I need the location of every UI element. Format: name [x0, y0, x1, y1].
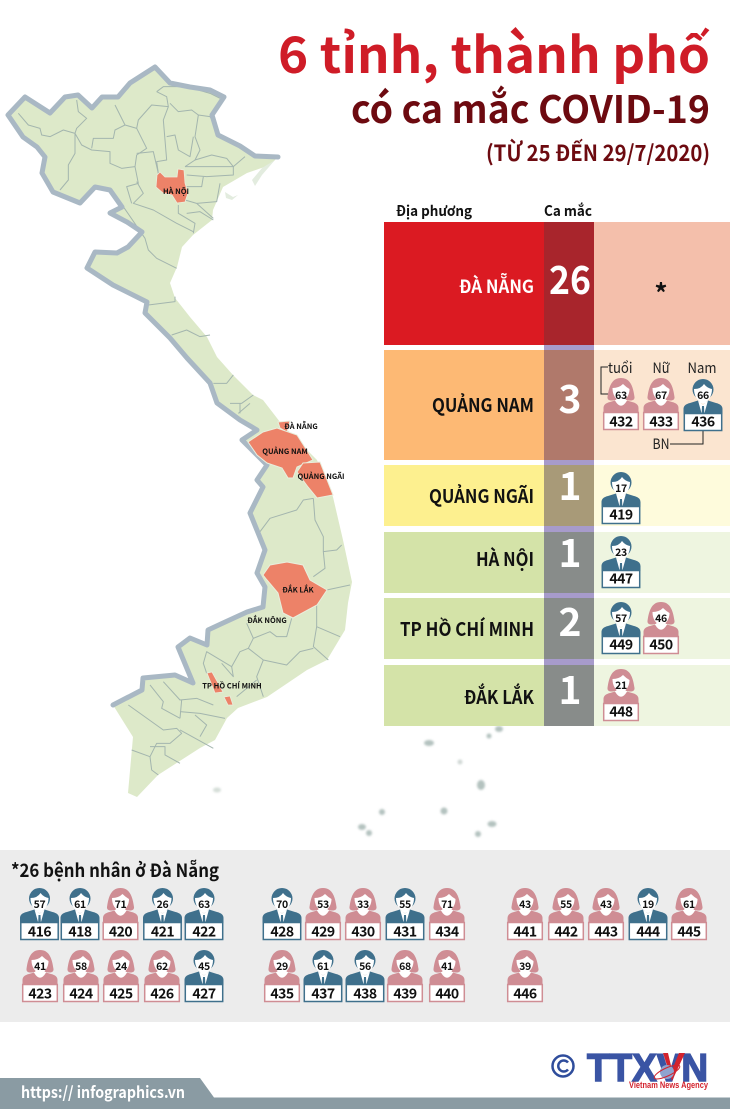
patient 449 — [602, 602, 640, 654]
patient 448 — [604, 669, 638, 722]
logo tagline: Vietnam News Agency — [629, 1080, 709, 1091]
case column separators — [544, 345, 594, 665]
row: Ha Noi — [384, 523, 730, 593]
map: place names: ĐẮK LẮK — [282, 584, 315, 596]
patient 431: 55 — [399, 897, 411, 912]
title date range: (TỪ 25 ĐẾN 29/7/2020) — [486, 136, 710, 168]
row: TP Ho Chi Minh — [384, 592, 730, 659]
patient 420: 71 — [115, 897, 126, 912]
footer url: https:// infographics.vn — [21, 1079, 185, 1103]
patient 435 — [264, 950, 300, 1004]
patient 435: 29 — [276, 959, 288, 974]
patient 449: 449 — [609, 634, 633, 654]
patient 424: 424 — [69, 984, 93, 1004]
patient 436: 66 — [697, 388, 709, 403]
case table — [384, 222, 730, 726]
patient 438: 438 — [353, 984, 377, 1004]
patient 421: 26 — [157, 897, 168, 912]
patient 445: 445 — [677, 922, 701, 942]
map: place names: ĐẮK NÔNG — [247, 614, 287, 626]
logo globe — [653, 1053, 685, 1082]
patient 442 — [548, 888, 584, 942]
patient 445 — [672, 888, 706, 942]
patient 423: 41 — [34, 959, 46, 974]
map: place names: QUẢNG NAM — [262, 446, 308, 457]
patient 424 — [64, 950, 98, 1004]
map: western border — [8, 67, 278, 705]
patient 431 — [386, 888, 424, 942]
patient 440: 440 — [435, 984, 459, 1004]
patient 419: 419 — [609, 504, 633, 524]
map: highlighted province Quang Nam — [248, 428, 313, 478]
map: highlighted province Da Nang — [278, 421, 290, 432]
table column headers — [396, 200, 592, 221]
logo: TTXVN — [552, 1047, 709, 1091]
patient 426: 426 — [150, 984, 174, 1004]
legend labels in Quang Nam row: BN — [652, 433, 670, 454]
patient 442: 442 — [554, 922, 578, 942]
patient 426: 62 — [156, 959, 168, 974]
patient 440 — [430, 950, 464, 1004]
patient 433: 433 — [649, 412, 673, 432]
patient 449: 57 — [615, 611, 627, 626]
patient 425 — [104, 950, 138, 1004]
map: place names: TP HỒ CHÍ MINH — [202, 680, 262, 692]
patient 444: 444 — [636, 922, 660, 942]
row: Ha Noi: 1 — [558, 523, 582, 579]
patient 443 — [588, 888, 624, 942]
patient 429 — [306, 888, 340, 942]
row: Dak Lak: ĐẮK LẮK — [464, 683, 535, 710]
patient 447: 447 — [609, 568, 633, 588]
table patients — [602, 378, 722, 722]
patient 438 — [346, 950, 384, 1004]
patient 430: 430 — [351, 922, 375, 942]
row: Dak Lak: 1 — [558, 660, 582, 716]
patient 444 — [628, 888, 668, 942]
bracket: age pointer — [601, 367, 612, 394]
patient 436: 436 — [691, 412, 715, 432]
patient 418: 61 — [74, 897, 86, 912]
patient 431: 431 — [393, 922, 417, 942]
panel: Da Nang patients — [0, 850, 730, 1022]
patient 420 — [103, 888, 138, 942]
logo wordmark: TTXVN — [587, 1047, 708, 1090]
patient 433: 67 — [655, 388, 667, 403]
icon: copyright — [552, 1056, 574, 1076]
patient 427: 427 — [192, 984, 216, 1004]
patient 423 — [22, 950, 58, 1004]
patient 428 — [262, 888, 302, 942]
patient 419: 17 — [615, 481, 627, 496]
patient 434 — [430, 888, 464, 942]
patient 416: 416 — [28, 922, 51, 942]
patient 441: 43 — [519, 897, 531, 912]
patient 437: 437 — [311, 984, 335, 1004]
map: highlighted province Ha Noi — [156, 169, 188, 203]
patient 446: 446 — [513, 984, 537, 1004]
patient 434: 71 — [441, 897, 453, 912]
patient 448: 21 — [615, 678, 627, 693]
patient 425: 425 — [109, 984, 133, 1004]
patient 432: 432 — [609, 412, 633, 432]
row: Da Nang: ĐÀ NẴNG — [459, 272, 534, 299]
patient 426 — [144, 950, 180, 1004]
patient 445: 61 — [683, 897, 695, 912]
map: province borders north — [18, 87, 253, 413]
patient 422: 422 — [192, 922, 216, 942]
patient 450: 450 — [649, 634, 673, 654]
patient 437: 61 — [317, 959, 329, 974]
patient 427: 45 — [198, 959, 210, 974]
title — [278, 16, 710, 168]
map: highlighted city Ho Chi Minh — [207, 672, 233, 705]
legend labels in Quang Nam row: tuổi — [608, 357, 632, 378]
row: Dak Lak — [384, 660, 730, 726]
bracket: patient number pointer — [670, 430, 703, 444]
patient 427 — [184, 950, 224, 1004]
patient 450: 46 — [655, 611, 667, 626]
patient 429: 53 — [317, 897, 329, 912]
patient 443: 43 — [600, 897, 612, 912]
row: Quang Ngai — [384, 456, 730, 526]
patient 430 — [346, 888, 380, 942]
patient 428: 428 — [270, 922, 294, 942]
patient 421 — [143, 888, 182, 942]
table column headers: Địa phương — [396, 200, 472, 221]
patient 446 — [508, 950, 542, 1004]
row: Quang Ngai: QUẢNG NGÃI — [429, 482, 534, 509]
patient 443: 443 — [594, 922, 618, 942]
map: province borders south — [128, 403, 350, 775]
patient 420: 420 — [109, 922, 132, 942]
patient 423: 423 — [28, 984, 52, 1004]
title line 2: có ca mắc COVID-19 — [351, 79, 710, 134]
patient 418: 418 — [68, 922, 92, 942]
patient 416: 57 — [34, 897, 45, 912]
patient 419 — [602, 472, 640, 524]
patient 450 — [644, 602, 678, 654]
map: place names: HÀ NỘI — [163, 186, 189, 197]
patient 430: 33 — [357, 897, 369, 912]
patient 428: 70 — [276, 897, 288, 912]
patient 436 — [684, 379, 722, 432]
patient 439 — [388, 950, 422, 1004]
patient 425: 24 — [115, 959, 127, 974]
patient 434: 434 — [435, 922, 459, 942]
patient 447 — [602, 536, 640, 588]
row: TP Ho Chi Minh: TP HỒ CHÍ MINH — [400, 615, 534, 642]
map of Vietnam — [8, 67, 503, 837]
map: highlighted province Dak Lak — [263, 562, 327, 618]
row: Quang Nam: QUẢNG NAM — [432, 391, 534, 418]
patient 444: 19 — [642, 897, 654, 912]
patient 441: 441 — [513, 922, 537, 942]
legend labels in Quang Nam row: Nữ — [652, 357, 671, 378]
panel heading: *26 bệnh nhân ở Đà Nẵng — [11, 857, 219, 883]
patient 421: 421 — [151, 922, 174, 942]
map: offshore islands — [213, 726, 503, 837]
row: TP Ho Chi Minh: 2 — [558, 592, 582, 648]
patient 442: 55 — [560, 897, 572, 912]
row: Ha Noi: HÀ NỘI — [476, 545, 534, 572]
patient 439: 439 — [393, 984, 417, 1004]
table column headers: Ca mắc — [544, 200, 592, 221]
row: Quang Nam: 3 — [558, 369, 582, 425]
patient 448: 448 — [609, 702, 633, 722]
legend labels in Quang Nam row: Nam — [688, 357, 716, 378]
map: highlighted province Quang Ngai — [297, 462, 333, 498]
patient 416 — [20, 888, 59, 942]
row: Da Nang: 26 — [549, 250, 591, 306]
patient 441 — [508, 888, 542, 942]
map: place names: QUẢNG NGÃI — [298, 470, 344, 482]
patient 440: 41 — [441, 959, 453, 974]
patient 438: 56 — [359, 959, 371, 974]
patient 446: 39 — [519, 959, 531, 974]
patient 422 — [184, 888, 224, 942]
patient 439: 68 — [399, 959, 411, 974]
patient 418 — [60, 888, 100, 942]
map: place names: ĐÀ NẴNG — [284, 420, 318, 432]
patient 422: 63 — [198, 897, 210, 912]
patient 435: 435 — [270, 984, 294, 1004]
row: Quang Ngai: 1 — [558, 456, 582, 512]
row: Da Nang — [384, 222, 730, 345]
patient 424: 58 — [75, 959, 87, 974]
footer bar — [0, 1078, 730, 1109]
patient 432 — [604, 378, 638, 432]
patient 447: 23 — [615, 545, 627, 560]
row: Quang Nam — [384, 350, 730, 460]
patient 437 — [304, 950, 342, 1004]
map: land mass — [8, 67, 352, 797]
legend labels in Quang Nam row — [601, 357, 716, 454]
patient 429: 429 — [311, 922, 335, 942]
map: place names — [163, 186, 344, 692]
patient 433 — [644, 378, 678, 432]
row: Da Nang: * — [654, 274, 668, 311]
patient 432: 63 — [615, 388, 627, 403]
map: Quang Ninh coast islands — [225, 160, 275, 200]
title line 1: 6 tỉnh, thành phố — [278, 16, 710, 88]
